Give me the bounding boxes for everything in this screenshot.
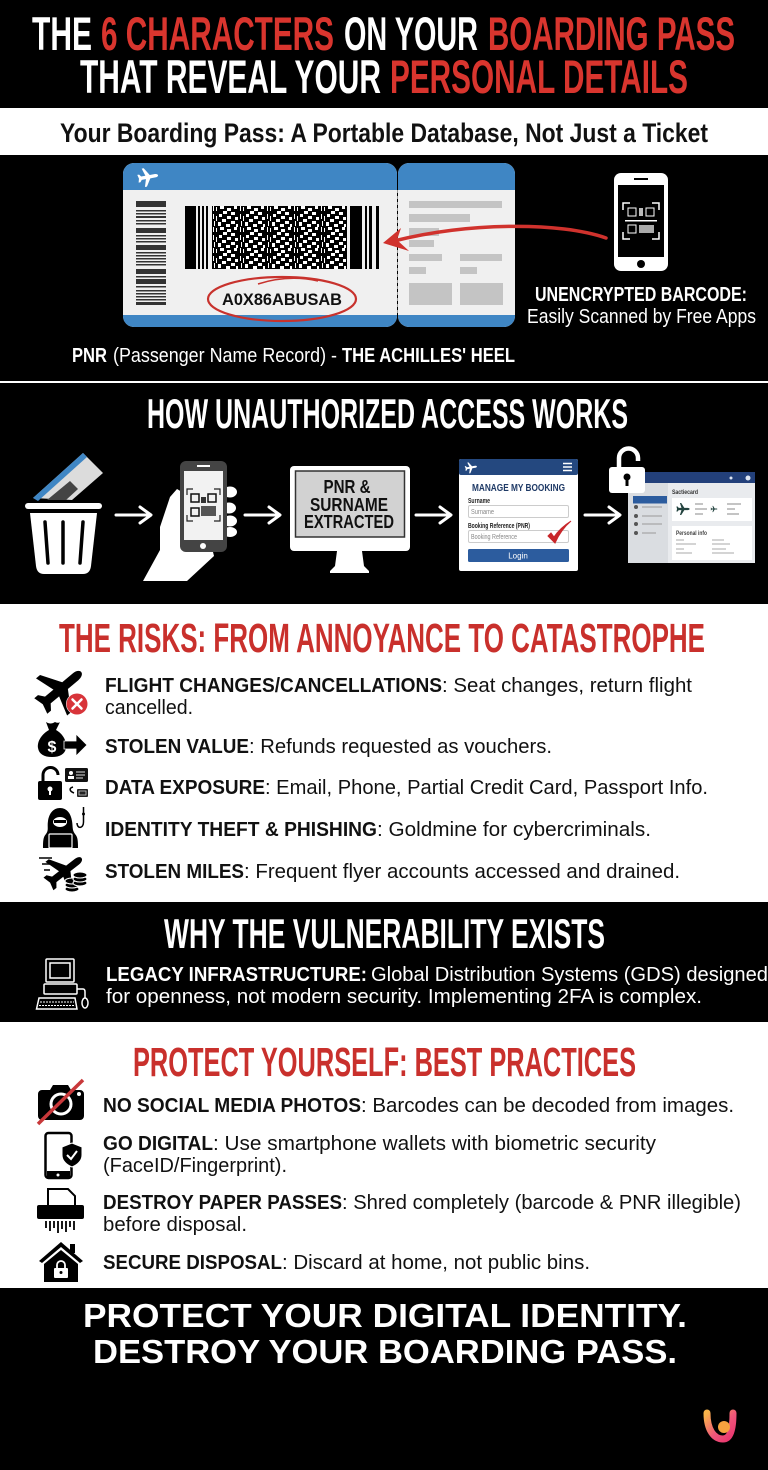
- icon: house with lock: [39, 1242, 83, 1282]
- vulnerability text: Global Distribution Systems (GDS) designed: [371, 963, 768, 986]
- protect 3 text: : Shred completely (barcode & PNR illegible): [342, 1191, 741, 1214]
- title line 1: THE: [32, 7, 92, 60]
- booking login form: Surname: [471, 509, 494, 516]
- icon: plane on ticket: [136, 166, 160, 188]
- dashboard screen: Personal info: [676, 530, 707, 537]
- icon: money bag with arrow: $: [48, 739, 57, 756]
- arrow 3: [416, 507, 451, 523]
- icon: monitor with extracted data: SURNAME: [310, 495, 388, 515]
- PNR code text: A0X86ABUSAB: [222, 290, 342, 309]
- icon: open padlock: [609, 448, 645, 493]
- barcode caption: [527, 284, 756, 328]
- arrow 1: [116, 507, 151, 523]
- protect 1 text: [103, 1094, 734, 1117]
- icon: hacker with hook: [43, 807, 85, 848]
- red circle around PNR: [208, 277, 356, 321]
- arrow 2: [245, 507, 280, 523]
- title line 1: ON YOUR: [344, 7, 478, 60]
- title line 2: THAT REVEAL YOUR: [80, 50, 381, 103]
- protect 4 text: SECURE DISPOSAL: [103, 1251, 282, 1274]
- panel: how unauthorized access works: [0, 381, 768, 604]
- title line 1: 6 CHARACTERS: [101, 7, 334, 60]
- protect 3 text: before disposal.: [103, 1213, 247, 1236]
- panel: boarding pass section: [0, 155, 768, 381]
- panel: protect yourself: [0, 1022, 768, 1288]
- small side barcode: [136, 201, 166, 305]
- icon: legacy computer: [36, 959, 88, 1009]
- title line 1: [32, 7, 735, 60]
- icon: open lock with ID cards: [38, 768, 88, 800]
- risk 4 text: : Goldmine for cybercriminals.: [377, 818, 651, 841]
- icon: paper shredder: [37, 1189, 84, 1233]
- risk 5 text: STOLEN MILES: [105, 860, 244, 883]
- arrow: phone to barcode: [383, 226, 606, 251]
- PNR caption: (Passenger Name Record) -: [113, 345, 337, 367]
- main 2D barcode: [185, 206, 379, 269]
- protect 3 text: DESTROY PAPER PASSES: [103, 1191, 342, 1214]
- booking login form: Booking Reference: [471, 534, 517, 541]
- booking login form: MANAGE MY BOOKING: [472, 482, 565, 494]
- icon: monitor with extracted data: PNR &: [324, 477, 370, 497]
- icon: brand logo: [707, 1413, 733, 1439]
- risk 2 text: [105, 735, 552, 758]
- dashboard screen: Sactiecard: [672, 490, 698, 496]
- protect 2 text: [103, 1132, 657, 1177]
- risk 4 text: IDENTITY THEFT & PHISHING: [105, 818, 377, 841]
- closing message: DESTROY YOUR BOARDING PASS.: [93, 1333, 677, 1370]
- icon: cancelled flight: [25, 653, 97, 725]
- icon: camera crossed out: [38, 1080, 84, 1124]
- risk 5 text: : Frequent flyer accounts accessed and drained.: [244, 860, 680, 883]
- stub grey lines: [409, 201, 503, 305]
- risk 2 text: STOLEN VALUE: [105, 735, 249, 758]
- risk 3 text: : Email, Phone, Partial Credit Card, Passport Info.: [265, 776, 708, 799]
- PNR caption: THE ACHILLES' HEEL: [342, 345, 515, 367]
- risk 1 text: FLIGHT CHANGES/CANCELLATIONS: [105, 674, 442, 697]
- panel: why the vulnerability exists: [0, 902, 768, 1022]
- boarding pass ticket: [123, 163, 515, 327]
- booking login form: Surname: [468, 498, 490, 505]
- protect 2 text: GO DIGITAL: [103, 1132, 213, 1155]
- protect 2 text: : Use smartphone wallets with biometric security: [213, 1132, 657, 1155]
- panel: subtitle band: [0, 108, 768, 155]
- closing message: PROTECT YOUR DIGITAL IDENTITY.: [83, 1297, 687, 1334]
- panel: the risks: [0, 604, 768, 902]
- panel: title: [0, 0, 768, 108]
- icon: trash with ticket: [25, 453, 103, 574]
- icon: phone with shield: [46, 1133, 82, 1178]
- risk 2 text: : Refunds requested as vouchers.: [249, 735, 552, 758]
- icon: monitor with extracted data: [290, 466, 410, 573]
- risk 4 text: [105, 818, 651, 841]
- booking login form: [459, 459, 578, 571]
- risk 1 text: cancelled.: [105, 696, 193, 719]
- protect 2 text: (FaceID/Fingerprint).: [103, 1154, 287, 1177]
- protect 4 text: [103, 1251, 590, 1274]
- risk 1 text: : Seat changes, return flight: [442, 674, 692, 697]
- dashboard screen: [628, 472, 755, 563]
- closing message: [83, 1297, 687, 1370]
- protect 3 text: [103, 1191, 741, 1236]
- icon: phone scanning: [614, 173, 668, 271]
- icon: plane with coins: [37, 843, 93, 899]
- protect 4 text: : Discard at home, not public bins.: [282, 1251, 590, 1274]
- vulnerability text: for openness, not modern security. Implementing 2FA is complex.: [106, 985, 702, 1008]
- risk 3 text: DATA EXPOSURE: [105, 776, 265, 799]
- icon: hand holding phone: [143, 461, 237, 581]
- PNR caption: [72, 345, 515, 367]
- icon: money bag with arrow: [38, 722, 87, 757]
- vulnerability text: LEGACY INFRASTRUCTURE:: [106, 963, 367, 986]
- arrow 4: [585, 507, 620, 523]
- protect 1 text: : Barcodes can be decoded from images.: [361, 1094, 734, 1117]
- vulnerability text: [106, 963, 768, 1008]
- protect 1 text: NO SOCIAL MEDIA PHOTOS: [103, 1094, 361, 1117]
- PNR caption: PNR: [72, 345, 107, 367]
- panel: footer call to action: [0, 1288, 768, 1470]
- booking login form: Booking Reference (PNR): [468, 523, 530, 530]
- risk 1 text: [105, 674, 692, 719]
- icon: monitor with extracted data: EXTRACTED: [304, 512, 394, 532]
- booking login form: Login: [508, 552, 528, 560]
